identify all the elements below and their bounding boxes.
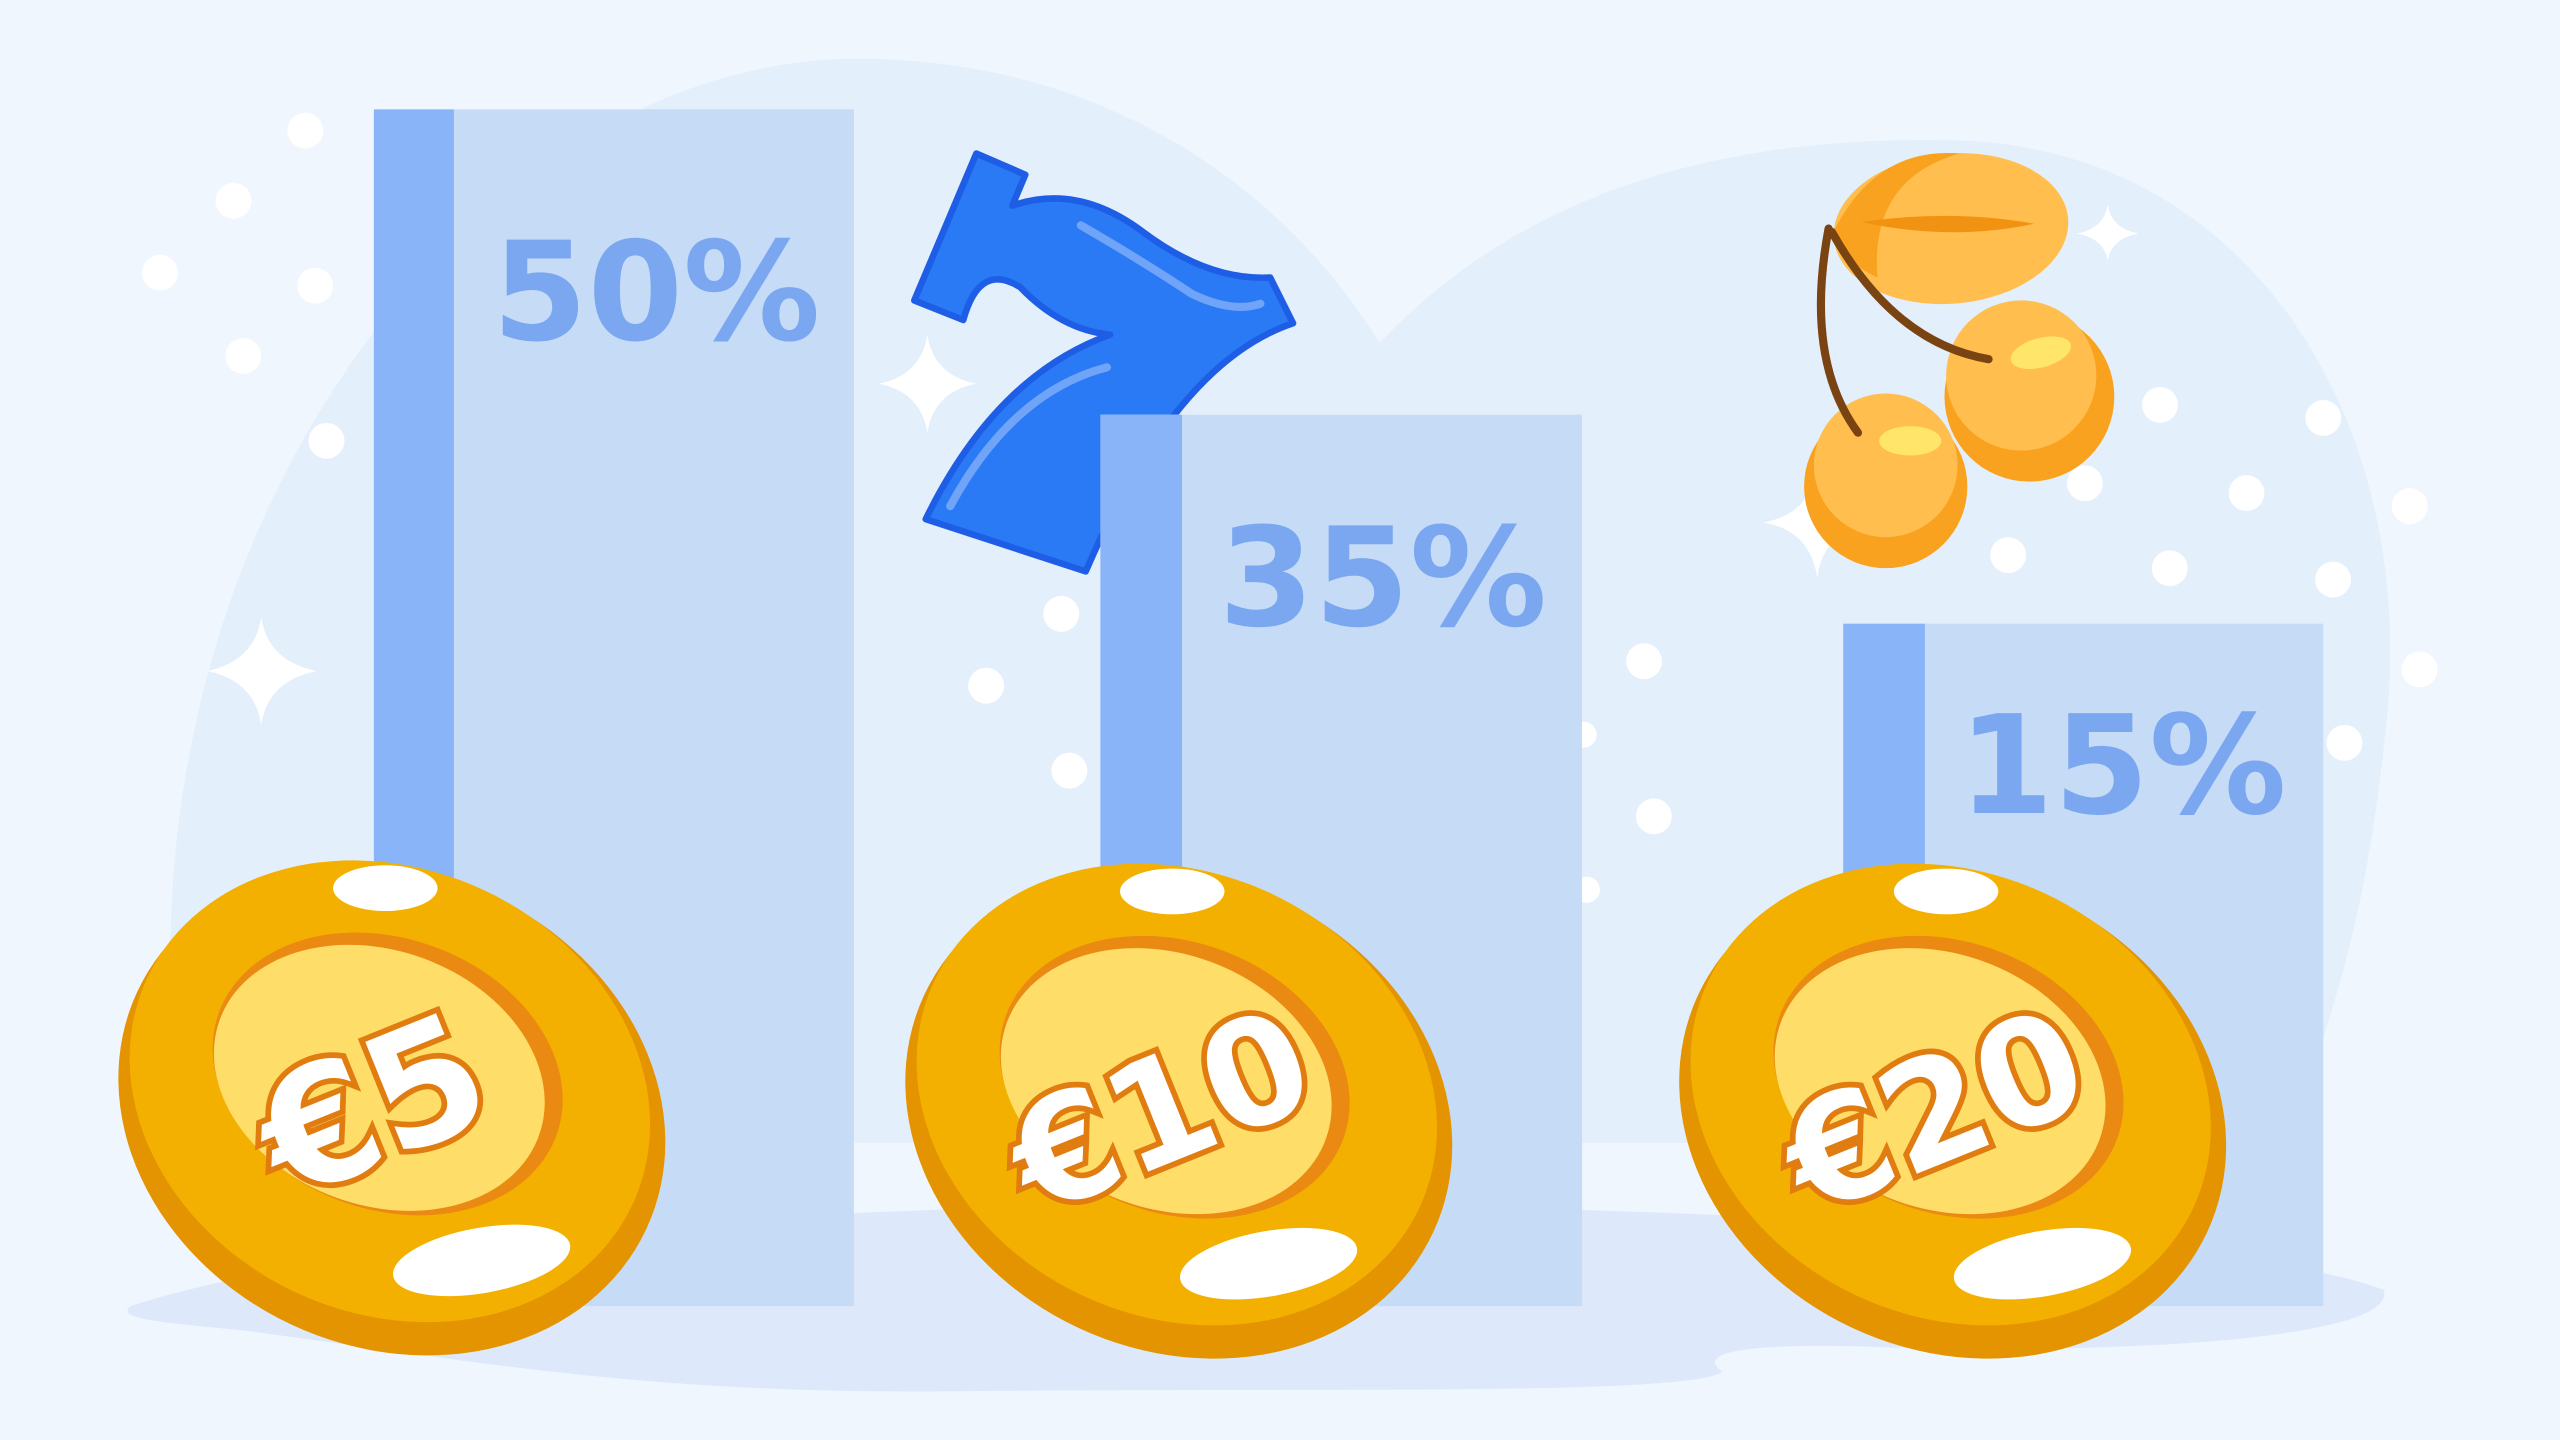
lucky 7 icon [914,153,1293,571]
coin: €10: €10 [984,975,1335,1250]
coin: €5 [37,777,746,1440]
bar: 50%: 50% [492,214,820,373]
coin: €5: €5 [228,975,514,1239]
bar: 50% [374,109,854,1306]
coin: €10 [824,780,1533,1440]
bar: 35% [1100,415,1582,1306]
bar: 35%: 35% [1219,499,1547,658]
coin: €20 [1598,780,2307,1440]
bar: 15%: 15% [1958,687,2287,846]
bar: 15% [1843,624,2323,1306]
cherries icon [1804,144,2114,568]
coin: €20: €20 [1758,975,2109,1250]
sparkles [207,204,2139,725]
decorative dots [142,113,2438,903]
